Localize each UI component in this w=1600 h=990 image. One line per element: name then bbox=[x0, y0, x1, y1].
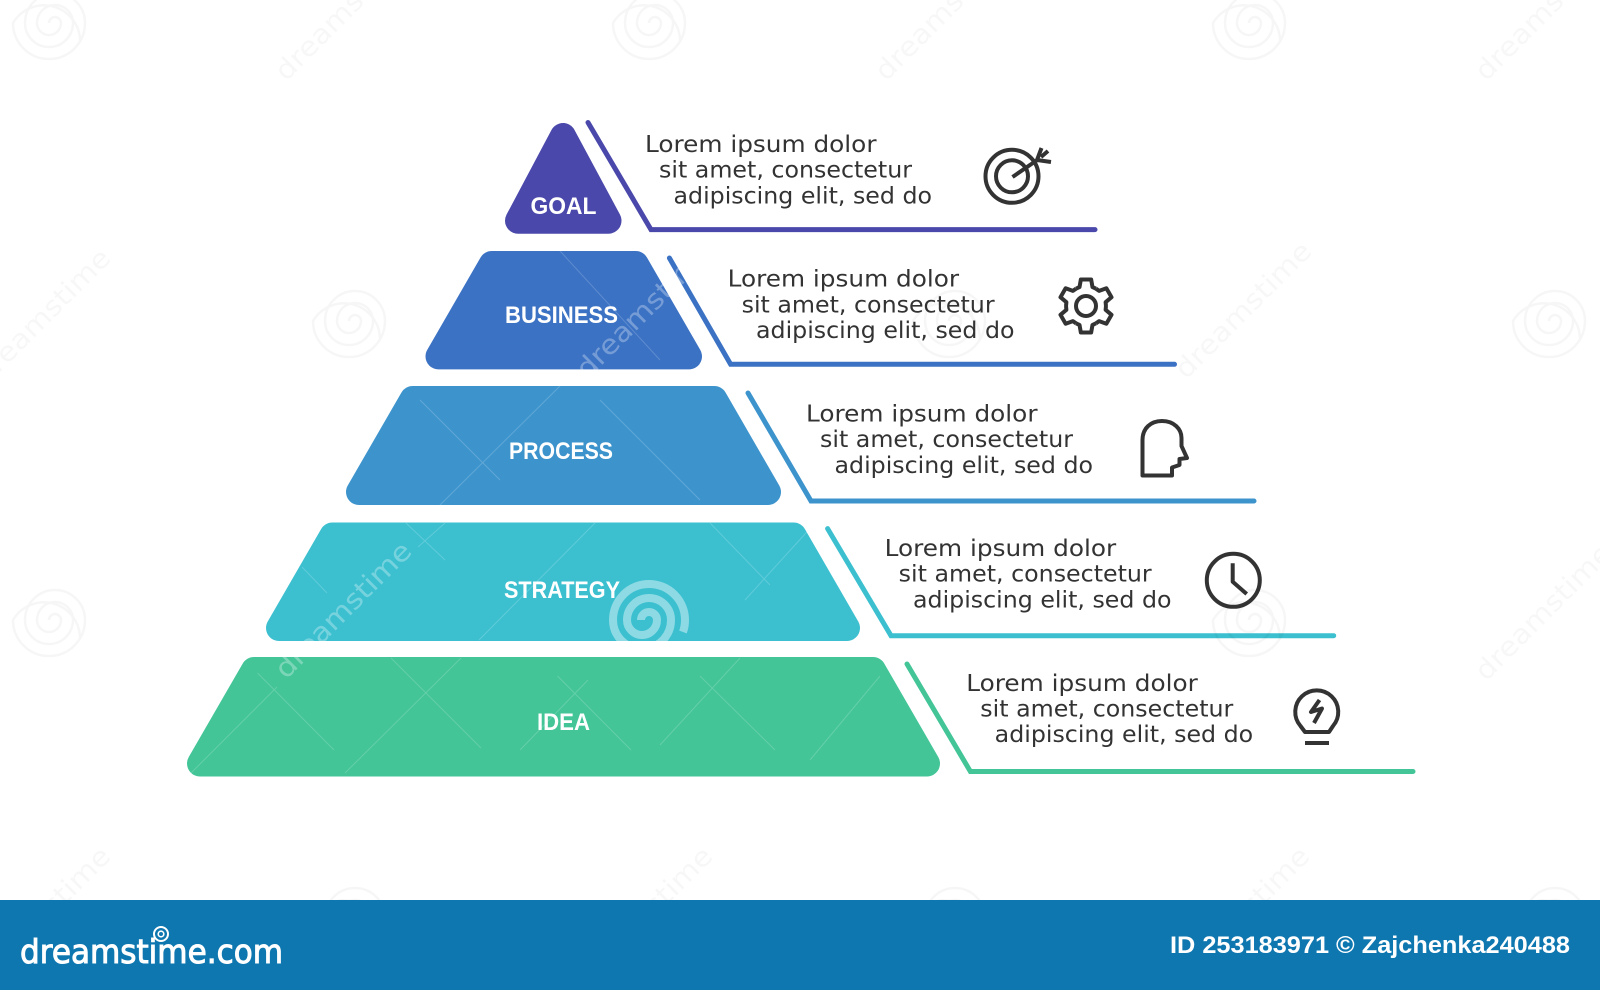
icon: clock bbox=[1207, 554, 1260, 607]
pyramid level: goal bbox=[518, 136, 608, 221]
text block: business: adipiscing elit, sed do bbox=[756, 318, 1014, 344]
label: STRATEGY: STRATEGY bbox=[504, 577, 620, 604]
text block: business: sit amet, consectetur bbox=[742, 292, 995, 318]
text block: strategy: adipiscing elit, sed do bbox=[913, 587, 1172, 613]
label: PROCESS: PROCESS bbox=[509, 438, 613, 465]
text block: idea: adipiscing elit, sed do bbox=[995, 722, 1253, 748]
pyramid level: process bbox=[359, 399, 768, 492]
footer credit: ID 253183971 © Zajchenka240488 bbox=[1170, 932, 1570, 959]
footer bar bbox=[0, 900, 1600, 990]
infographic canvas: dreamstime bbox=[570, 236, 719, 385]
connector line: business bbox=[669, 258, 1174, 364]
connector line: idea bbox=[907, 664, 1413, 772]
connector line: strategy bbox=[828, 529, 1334, 636]
icon: light bulb bbox=[1295, 690, 1338, 743]
label: IDEA: IDEA bbox=[537, 709, 590, 736]
text block: goal bbox=[645, 132, 932, 209]
infographic canvas: dreamstime bbox=[269, 536, 418, 685]
text block: idea: sit amet, consectetur bbox=[980, 696, 1234, 722]
text block: strategy bbox=[885, 536, 1172, 613]
text block: business: Lorem ipsum dolor bbox=[728, 267, 960, 293]
connector line: process bbox=[748, 393, 1254, 501]
icon: target bbox=[986, 148, 1051, 203]
pyramid level: idea bbox=[200, 670, 927, 764]
icon: gear bbox=[1058, 280, 1114, 332]
text block: goal: sit amet, consectetur bbox=[659, 158, 913, 184]
icon: head bbox=[1142, 421, 1187, 476]
infographic canvas: dreamstime bbox=[1167, 841, 1316, 990]
infographic canvas: dreamstime bbox=[1169, 236, 1318, 385]
text block: process: sit amet, consectetur bbox=[820, 427, 1074, 453]
pyramid level: business bbox=[438, 264, 689, 356]
text block: process: Lorem ipsum dolor bbox=[806, 401, 1038, 427]
text block: goal: Lorem ipsum dolor bbox=[645, 132, 877, 158]
pyramid level: strategy bbox=[279, 536, 847, 628]
watermark spiral bbox=[613, 584, 685, 649]
text block: business bbox=[728, 267, 1014, 344]
text block: process: adipiscing elit, sed do bbox=[834, 453, 1093, 479]
text block: process bbox=[806, 401, 1093, 479]
text block: strategy: Lorem ipsum dolor bbox=[885, 536, 1117, 562]
text block: strategy: sit amet, consectetur bbox=[899, 562, 1152, 588]
label: GOAL: GOAL bbox=[530, 193, 596, 220]
text block: goal: adipiscing elit, sed do bbox=[674, 183, 932, 209]
text block: idea: Lorem ipsum dolor bbox=[966, 671, 1198, 697]
pyramid bbox=[200, 136, 927, 764]
infographic canvas: dreamstime bbox=[570, 841, 719, 990]
label: BUSINESS: BUSINESS bbox=[505, 302, 618, 329]
footer logo: dreamstime.com bbox=[20, 932, 283, 971]
connector line: goal bbox=[588, 122, 1095, 230]
text block: idea bbox=[966, 671, 1253, 748]
